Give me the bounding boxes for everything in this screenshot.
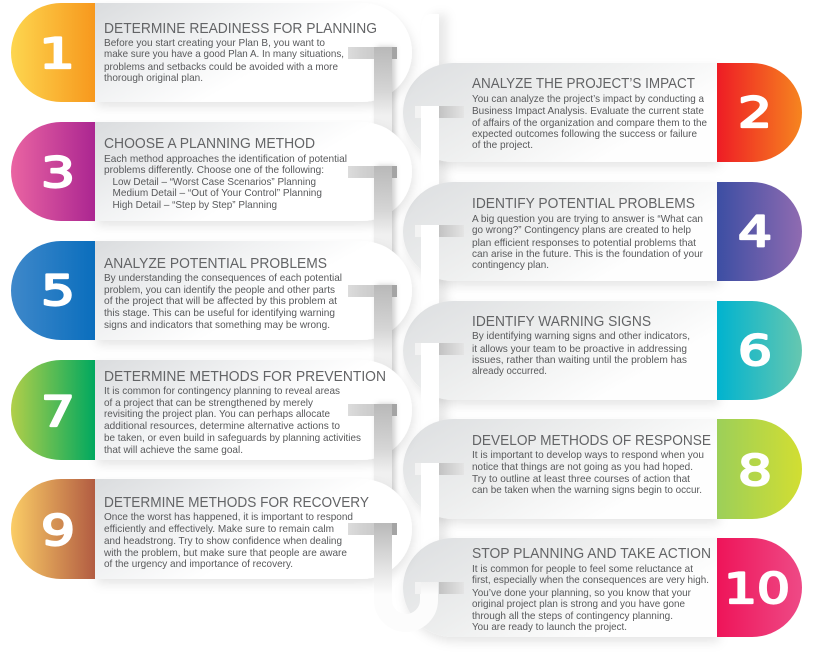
body text: You are ready to launch the project.: [472, 621, 627, 633]
body text: [472, 213, 703, 271]
number 3: 3: [41, 148, 75, 197]
body text: It is common for people to feel some reluctance at: [472, 563, 693, 575]
body text: of affairs of the organization and compare them to the: [472, 117, 707, 129]
connector link: [415, 225, 464, 315]
body text: can arise in the future. This is the foundation of your: [472, 248, 703, 260]
body text: Each method approaches the identification of potential: [104, 153, 347, 165]
card 2: analyze the project's impact: [403, 63, 802, 196]
body text: Try to outline at least three courses of action that: [472, 473, 690, 485]
heading: DETERMINE METHODS FOR RECOVERY: [104, 494, 369, 511]
body text: and headstrong. Try to show confidence when dealing: [104, 535, 342, 547]
heading: DETERMINE METHODS FOR PREVENTION: [104, 368, 386, 385]
body text: first, especially when the consequences are very high.: [472, 574, 709, 586]
card 7: determine methods for prevention: [11, 360, 412, 504]
connector link: [415, 106, 464, 196]
body text: original project plan is strong and you have gone: [472, 598, 685, 610]
body text: High Detail – “Step by Step” Planning: [112, 199, 277, 211]
connector link: [439, 582, 464, 594]
body text: notice that things are not going as you had hoped.: [472, 461, 693, 473]
body text: be taken, or even build in safeguards by planning activities: [104, 432, 361, 444]
body text: additional resources, determine alternative actions to: [104, 420, 340, 432]
body text: By understanding the consequences of each potential: [104, 272, 342, 284]
card 10: stop planning and take action: [403, 538, 802, 637]
number 4: 4: [738, 207, 772, 256]
body text: By identifying warning signs and other indicators,: [472, 330, 690, 342]
body text: can be taken when the warning signs begin to occur.: [472, 484, 702, 496]
body text: [472, 449, 704, 496]
number 5: 5: [41, 266, 75, 315]
body text: of a project that can be strengthened by merely: [104, 397, 314, 409]
body text: problems and setbacks could be avoided with a more: [104, 61, 338, 73]
body text: [104, 272, 342, 331]
heading: ANALYZE THE PROJECT’S IMPACT: [472, 75, 695, 92]
body text: It is important to develop ways to respond when you: [472, 449, 704, 461]
heading: STOP PLANNING AND TAKE ACTION: [472, 545, 711, 562]
heading: ANALYZE POTENTIAL PROBLEMS: [104, 255, 327, 272]
body text: with the problem, but make sure that people are aware: [103, 547, 347, 559]
body text: expected outcomes following the success or failure: [472, 128, 697, 140]
card 9: determine methods for recovery: [11, 479, 429, 623]
heading: CHOOSE A PLANNING METHOD: [104, 135, 315, 152]
body text: [103, 511, 353, 570]
body text: already occurred.: [472, 365, 547, 377]
number 8: 8: [738, 446, 772, 495]
card 6: identify warning signs: [403, 301, 802, 433]
body text: problems differently. Choose one of the following:: [104, 164, 324, 176]
body text: [104, 153, 347, 211]
number 7: 7: [41, 387, 75, 436]
card 5: analyze potential problems: [11, 241, 412, 385]
body text: Low Detail – “Worst Case Scenarios” Planning: [112, 176, 316, 188]
body text: Before you start creating your Plan B, you want to: [104, 37, 325, 49]
card 4: identify potential problems: [403, 182, 802, 315]
heading: DEVELOP METHODS OF RESPONSE: [472, 432, 711, 449]
heading: IDENTIFY WARNING SIGNS: [472, 313, 651, 330]
body text: plan efficient responses to potential problems that: [472, 237, 696, 249]
body text: make sure you have a good Plan A. In many situations,: [104, 48, 344, 60]
card 3: choose a planning method: [11, 122, 412, 266]
body text: [472, 93, 707, 151]
body text: You can analyze the project’s impact by conducting a: [472, 93, 704, 105]
body text: problem, you can identify the people and other parts: [104, 284, 335, 296]
body text: [472, 563, 709, 633]
body text: contingency plan.: [472, 259, 549, 271]
body text: Medium Detail – “Out of Your Control” Planning: [112, 187, 322, 199]
number 6: 6: [738, 326, 772, 375]
body text: of the project.: [472, 139, 533, 151]
body text: It is common for contingency planning to reveal areas: [104, 385, 340, 397]
connector link: [348, 47, 397, 147]
body text: it allows your team to be proactive in addressing: [472, 343, 687, 355]
body text: [104, 37, 344, 84]
U-shaped connector link: [348, 523, 429, 623]
body text: A big question you are trying to answer is “What can: [472, 213, 703, 225]
card 8: develop methods of response: [403, 419, 802, 553]
body text: thorough original plan.: [104, 72, 203, 84]
number 1: 1: [39, 29, 75, 78]
card 1: determine readiness for planning: [11, 3, 412, 147]
body text: this stage. This can be useful for identifying warning: [104, 307, 335, 319]
body text: [104, 385, 361, 456]
body text: that will achieve the same goal.: [104, 444, 243, 456]
number 2: 2: [738, 88, 772, 137]
body text: of the project that will be affected by this problem at: [104, 295, 337, 307]
connector link: [415, 343, 464, 433]
body text: signs and indicators that something may be wrong.: [104, 319, 330, 331]
body text: Once the worst has happened, it is important to respond: [104, 511, 353, 523]
body text: You’ve done your planning, so you know that your: [472, 587, 691, 599]
number 10: 10: [724, 564, 790, 613]
body text: of the urgency and importance of recovery.: [104, 558, 293, 570]
body text: Business Impact Analysis. Evaluate the current state: [472, 105, 704, 117]
connector link: [415, 463, 464, 553]
connector link: [348, 404, 397, 504]
body text: through all the steps of contingency planning.: [472, 610, 673, 622]
body text: efficiently and effectively. Make sure to remain calm: [104, 523, 334, 535]
body text: issues, rather than waiting until the problem has: [472, 354, 687, 366]
body text: revisiting the project plan. You can perhaps allocate: [104, 408, 330, 420]
connector link: [348, 285, 397, 385]
heading: DETERMINE READINESS FOR PLANNING: [104, 20, 377, 37]
connector link: [348, 166, 397, 266]
body text: go wrong?” Contingency plans are created to help: [472, 224, 691, 236]
connector rail: right chain background: [421, 14, 439, 620]
heading: IDENTIFY POTENTIAL PROBLEMS: [472, 195, 695, 212]
body text: [472, 330, 690, 377]
number 9: 9: [41, 506, 75, 555]
